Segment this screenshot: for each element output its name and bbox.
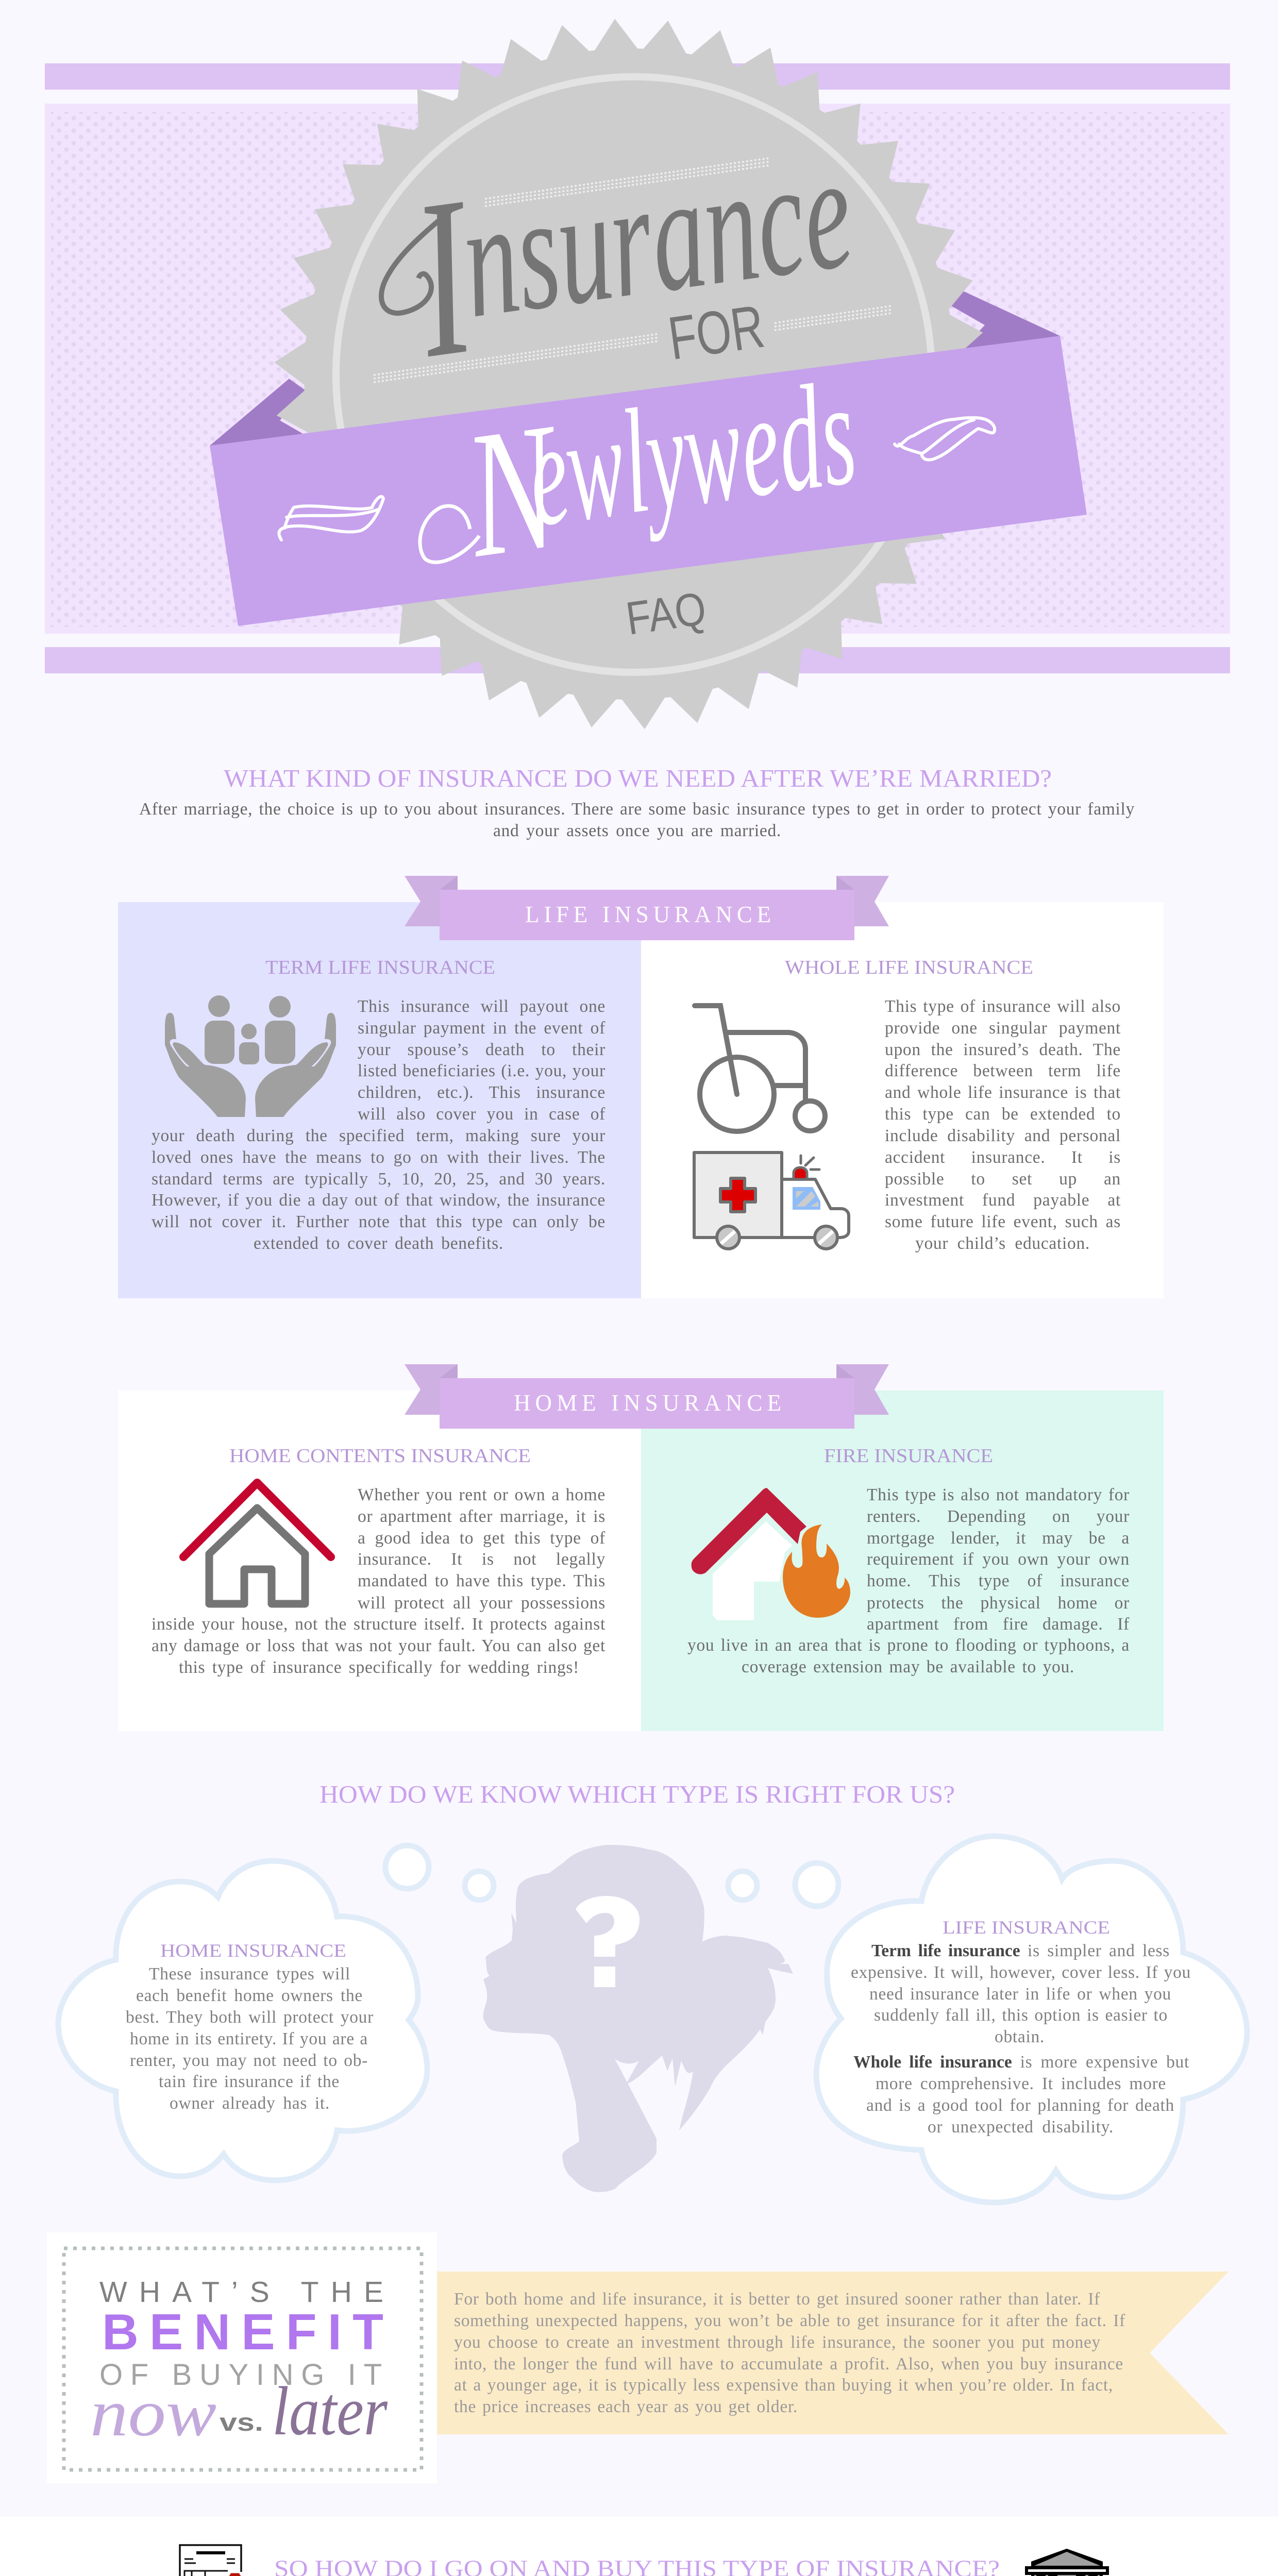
text: term life insurance: However, if you die a day out of that window, the insurance xyxy=(152,1191,606,1210)
text: right cloud: suddenly fall ill, this option is easier to xyxy=(874,2006,1168,2025)
header top band xyxy=(45,63,1230,90)
text: right cloud: obtain. xyxy=(995,2027,1045,2046)
text: whole life insurance: some future life event, such as xyxy=(885,1212,1121,1231)
text: fire insurance: protects the physical home or xyxy=(867,1594,1130,1613)
icon: policy document with shield xyxy=(180,2545,257,2576)
text: home contents insurance: any damage or loss that was not your fault. You can also get xyxy=(152,1636,606,1655)
text: whole life insurance: provide one singular payment xyxy=(885,1019,1121,1038)
text: term life insurance: extended to cover death benefits. xyxy=(254,1234,503,1253)
text: home contents insurance: insurance. It is not legally xyxy=(358,1550,606,1569)
text: sooner rather than later xyxy=(454,2290,1125,2416)
ribbon tails xyxy=(210,291,1060,446)
text: left cloud: renter, you may not need to ob- xyxy=(130,2051,368,2070)
text: home contents insurance: Whether you rent or own a home xyxy=(358,1485,606,1504)
text: whole life insurance: difference between term life xyxy=(885,1061,1121,1080)
text: fire insurance: This type is also not mandatory for xyxy=(867,1485,1130,1504)
text: whole life insurance: your child’s education. xyxy=(915,1234,1090,1253)
text: whole life insurance: include disability and personal xyxy=(885,1126,1121,1145)
heading: whole life insurance: WHOLE LIFE INSURANCE xyxy=(785,957,1033,978)
text: home contents insurance: inside your house, not the structure itself. It protects against xyxy=(152,1615,606,1634)
banner: life insurance: LIFE INSURANCE xyxy=(525,902,771,927)
icon: bank building xyxy=(1022,2549,1112,2576)
text: whole life insurance: This type of insurance will also xyxy=(885,997,1121,1016)
heading: fire insurance: FIRE INSURANCE xyxy=(824,1445,993,1467)
header dotted panel xyxy=(45,104,1230,634)
text: fire insurance: apartment from fire damage. If xyxy=(867,1615,1130,1634)
yellow flag ribbon xyxy=(437,2272,1229,2434)
icon: ambulance xyxy=(694,1153,849,1249)
icon: question mark xyxy=(576,1896,640,1987)
text: left cloud: These insurance types will xyxy=(149,1964,350,1984)
benefit title: now xyxy=(90,2376,216,2450)
text: whole life insurance: this type can be extended to xyxy=(885,1105,1121,1124)
text: right cloud: need insurance later in life or when you xyxy=(869,1985,1171,2004)
text: sooner rather than later: For both home and life insurance, it is better to get insured sooner rather than later. If xyxy=(454,2290,1100,2309)
panel: term life insurance background xyxy=(118,902,641,1298)
flourish left xyxy=(279,497,383,540)
heading: term life insurance: TERM LIFE INSURANCE xyxy=(265,957,495,978)
text: whole life insurance xyxy=(885,997,1121,1253)
text: whole life insurance: investment fund payable at xyxy=(885,1191,1121,1210)
text: left cloud: home in its entirety. If you are a xyxy=(130,2029,368,2048)
banner: home insurance xyxy=(405,1364,889,1429)
title word: Insurance: I xyxy=(399,149,490,406)
thought bubbles xyxy=(385,1845,838,1906)
section heading: which type is right: HOW DO WE KNOW WHICH TYPE IS RIGHT FOR US? xyxy=(320,1780,955,1808)
intro text: and your assets once you are married. xyxy=(493,821,781,840)
text: term life insurance: will not cover it. Further note that this type can only be xyxy=(152,1212,606,1231)
text: term life insurance: your spouse’s death to their xyxy=(358,1040,606,1059)
text: left cloud xyxy=(126,1964,374,2113)
text: term life insurance: will also cover you in case of xyxy=(358,1105,606,1124)
banner: life insurance xyxy=(405,876,889,940)
text: term life insurance xyxy=(152,997,606,1253)
benefit title: BENEFIT xyxy=(102,2303,383,2360)
text: term life insurance: loved ones have the means to go on with their lives. The xyxy=(152,1148,606,1167)
header bottom band xyxy=(45,647,1230,673)
text: fire insurance: mortgage lender, it may be a xyxy=(867,1529,1130,1548)
text: sooner rather than later: the price increases each year as you get older. xyxy=(454,2397,798,2416)
text: fire insurance: requirement if you own your own xyxy=(867,1550,1130,1569)
text: fire insurance: home. This type of insurance xyxy=(867,1571,1130,1590)
text: sooner rather than later: you choose to create an investment through life insurance, the sooner you put money xyxy=(454,2333,1101,2352)
silhouette: woman's head xyxy=(483,1845,793,2192)
text: left cloud: each benefit home owners the xyxy=(136,1986,363,2005)
text: right cloud: expensive. It will, however, cover less. If you xyxy=(851,1963,1191,1982)
text: right cloud: Whole life insurance is more expensive but xyxy=(853,2053,1189,2072)
text: right cloud: Term life insurance is simpler and less xyxy=(871,1941,1170,1960)
text: whole life insurance: and whole life insurance is that xyxy=(885,1083,1121,1102)
icon: house on fire xyxy=(692,1488,850,1620)
text: whole life insurance: upon the insured’s death. The xyxy=(885,1040,1121,1059)
title word: FAQ: FAQ xyxy=(623,583,709,645)
text: right cloud: and is a good tool for planning for death xyxy=(866,2096,1174,2115)
text: home contents insurance xyxy=(152,1485,606,1677)
text: sooner rather than later: something unexpected happens, you won’t be able to get insurance for it after the fact. If xyxy=(454,2311,1125,2330)
text: term life insurance: standard terms are typically 5, 10, 20, 25, and 30 years. xyxy=(152,1170,606,1189)
panel: benefit box xyxy=(47,2232,437,2483)
text: home contents insurance: will protect all your possessions xyxy=(358,1594,606,1613)
text: left cloud: tain fire insurance if the xyxy=(159,2072,340,2091)
thought cloud: right xyxy=(816,1836,1247,2202)
panel: whole life insurance background xyxy=(641,902,1164,1298)
benefit title: OF BUYING IT xyxy=(99,2358,382,2392)
text: term life insurance: singular payment in the event of xyxy=(358,1019,606,1038)
text: home contents insurance: a good idea to get this type of xyxy=(358,1529,606,1548)
panel: home contents background xyxy=(118,1391,641,1731)
title word: Newlyweds xyxy=(420,349,865,596)
text: term life insurance: children, etc.). This insurance xyxy=(358,1083,606,1102)
text: home contents insurance: mandated to have this type. This xyxy=(358,1571,606,1590)
text: sooner rather than later: at a younger age, it is typically less expensive than buying it when you’re older. In fact, xyxy=(454,2376,1113,2395)
intro text xyxy=(139,800,1135,840)
text: whole life insurance: possible to set up an xyxy=(885,1170,1121,1189)
icon: family in hands xyxy=(165,995,336,1117)
benefit title xyxy=(90,2276,388,2450)
text: left cloud: best. They both will protect your xyxy=(126,2008,374,2027)
text: right cloud: more comprehensive. It includes more xyxy=(876,2074,1166,2093)
bottom white strip xyxy=(0,2517,1278,2576)
cloud heading: home insurance: HOME INSURANCE xyxy=(160,1940,346,1961)
thought cloud: left xyxy=(58,1861,427,2180)
title word: FOR: FOR xyxy=(664,292,768,373)
title word: Newlyweds: ewlyweds xyxy=(518,349,865,558)
text: left cloud: owner already has it. xyxy=(170,2094,330,2113)
text: right cloud xyxy=(851,1941,1191,2137)
benefit title: WHAT’S THE xyxy=(99,2276,383,2309)
text: right cloud: or unexpected disability. xyxy=(928,2117,1114,2137)
text: whole life insurance: accident insurance. It is xyxy=(885,1148,1121,1167)
icon: wheelchair xyxy=(695,1006,825,1131)
benefit title: later xyxy=(272,2373,388,2450)
text: term life insurance: your death during the specified term, making sure your xyxy=(152,1126,606,1145)
banner: home insurance: HOME INSURANCE xyxy=(514,1390,781,1416)
text: home contents insurance: or apartment after marriage, it is xyxy=(358,1507,606,1526)
seal badge xyxy=(274,18,986,730)
panel: fire insurance background xyxy=(641,1391,1164,1731)
purple ribbon xyxy=(210,336,1087,626)
text: fire insurance: renters. Depending on your xyxy=(867,1507,1130,1526)
section heading: what kind of insurance: WHAT KIND OF INSURANCE DO WE NEED AFTER WE’RE MARRIED? xyxy=(224,764,1052,792)
title word: Insurance xyxy=(381,119,862,406)
icon: house xyxy=(183,1483,331,1604)
text: fire insurance: coverage extension may be available to you. xyxy=(742,1657,1074,1676)
text: term life insurance: This insurance will payout one xyxy=(358,997,606,1016)
dotted accent lines xyxy=(374,158,891,382)
text: fire insurance xyxy=(687,1485,1130,1676)
title word: Newlyweds: N xyxy=(453,384,576,596)
text: fire insurance: you live in an area that is prone to flooding or typhoons, a xyxy=(687,1636,1130,1655)
text: term life insurance: listed beneficiaries (i.e. you, your xyxy=(358,1061,606,1080)
intro text: After marriage, the choice is up to you about insurances. There are some basic insurance types to get in order to protect your family xyxy=(139,800,1135,819)
text: sooner rather than later: into, the longer the fund will have to accumulate a profit. Also, when you buy insurance xyxy=(454,2354,1123,2374)
benefit title: vs. xyxy=(220,2409,263,2436)
heading: home contents insurance: HOME CONTENTS INSURANCE xyxy=(229,1445,531,1467)
text: home contents insurance: this type of insurance specifically for wedding rings! xyxy=(179,1658,579,1677)
title word: Insurance: nsurance xyxy=(451,119,862,352)
flourish right xyxy=(895,418,995,460)
cloud heading: life insurance: LIFE INSURANCE xyxy=(943,1917,1110,1938)
